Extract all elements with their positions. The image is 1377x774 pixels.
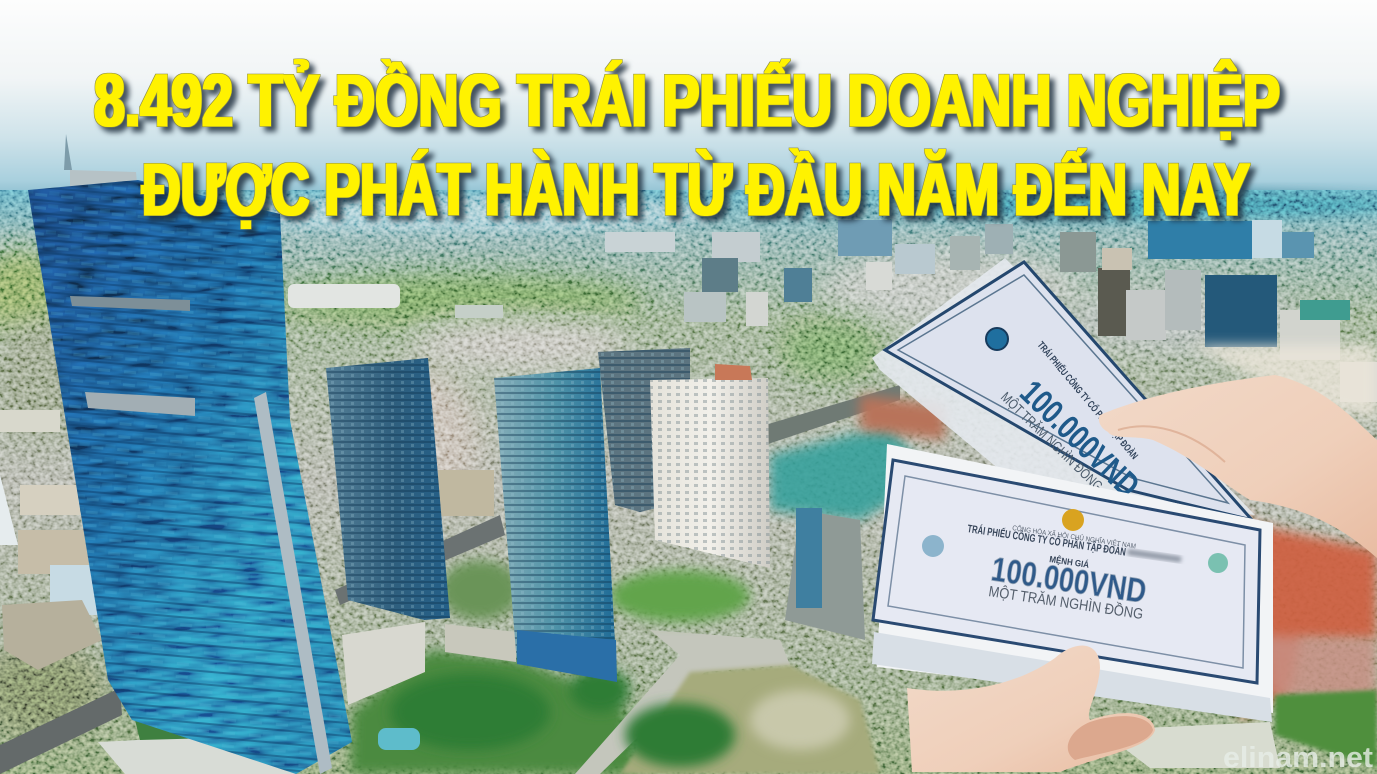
- background: sky: [0, 0, 1377, 196]
- front bond: denomination label: MỆNH GIÁ: [1049, 553, 1090, 570]
- lower hand holding bonds: [907, 646, 1155, 772]
- upper hand holding bonds: [1099, 375, 1377, 558]
- residential tower 5 (white): [650, 364, 770, 568]
- title: [94, 59, 1280, 231]
- front bond: amount in words: MỘT TRĂM NGHÌN ĐỒNG: [987, 582, 1144, 623]
- front bond: blurred company name: [1127, 549, 1181, 562]
- front bond: republic line: CỘNG HÒA XÃ HỘI CHỦ NGHĨA VIỆT NAM: [1012, 523, 1137, 550]
- watermark: elinam.net: [1223, 742, 1373, 774]
- front bond: emblem icon: [1062, 509, 1084, 531]
- front bond: company logo: [1208, 553, 1228, 573]
- front bond: face value: 100.000VND: [989, 550, 1149, 611]
- residential tower 4 (rear): [598, 348, 690, 512]
- main glass skyscraper: [28, 134, 352, 774]
- background: city panorama: [0, 190, 1377, 774]
- rear bond: face value: 100.000VND: [1012, 373, 1147, 505]
- residential tower 2: [326, 358, 450, 620]
- front bond certificate: [872, 444, 1273, 722]
- front bond: seal icon: [922, 535, 944, 557]
- ground: gardens and roads: [0, 385, 945, 774]
- rear bond: issuer line: TRÁI PHIẾU CÔNG TY CỔ PHẦN TẬP ĐOÀN: [1035, 339, 1141, 462]
- left side low-rise buildings: [0, 410, 865, 774]
- rear bond: seal icon: [986, 328, 1008, 350]
- front bond: issuer line: TRÁI PHIẾU CÔNG TY CỔ PHẦN TẬP ĐOÀN: [967, 522, 1127, 559]
- rear bond certificate: [872, 258, 1255, 520]
- rear bond: amount in words: MỘT TRĂM NGHÌN ĐỒNG: [998, 388, 1107, 494]
- residential tower 3: [494, 368, 617, 682]
- distant skyline: [605, 220, 1377, 402]
- pastel overlay behind bonds: [1100, 345, 1377, 768]
